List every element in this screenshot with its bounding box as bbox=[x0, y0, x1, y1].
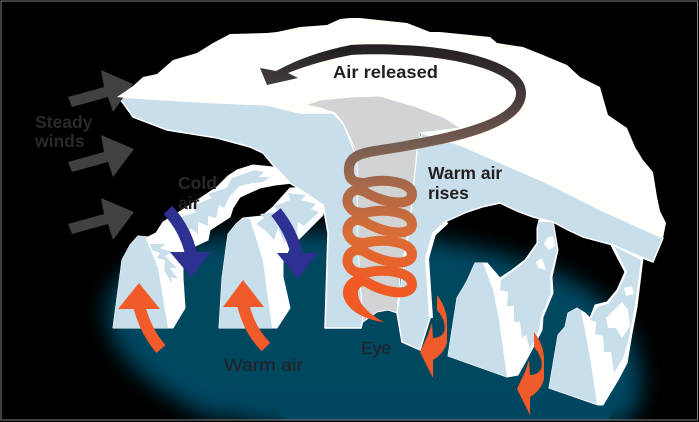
ocean surface glow bbox=[106, 231, 641, 420]
arrow: cold air right bbox=[276, 212, 318, 279]
label: eye: Eye bbox=[361, 338, 391, 358]
eye funnel bbox=[305, 96, 460, 322]
arc ice streaks bbox=[176, 170, 270, 240]
pillar face bbox=[113, 236, 168, 328]
rainband pillar: far left with arc bbox=[113, 165, 293, 328]
spiral tail bbox=[343, 275, 384, 322]
swirl arrow: right bbox=[517, 332, 544, 415]
rainband pillar: second with arc bbox=[219, 188, 323, 328]
pillar face bbox=[448, 263, 507, 377]
cloud top bbox=[117, 18, 666, 238]
cloud underside: left wall bbox=[118, 97, 363, 328]
white ice patches bbox=[544, 236, 555, 250]
spiral arrowhead bbox=[260, 45, 351, 85]
swirl arrow: left bbox=[420, 295, 447, 378]
arrow: steady wind middle bbox=[68, 135, 134, 177]
label: air released: Air released bbox=[333, 62, 438, 82]
spiral stroke bbox=[347, 49, 521, 292]
rainband pillar: far right bbox=[549, 243, 643, 405]
arrow: warm air left bbox=[118, 283, 161, 349]
arrow: warm air right bbox=[223, 280, 266, 347]
label: warm air: Warm air bbox=[224, 355, 303, 375]
pillar streaks bbox=[150, 244, 178, 284]
label: warm air rises: rises bbox=[428, 183, 469, 203]
arc ice streaks bbox=[590, 246, 641, 373]
label: cold air: air bbox=[178, 193, 200, 213]
pillar face bbox=[219, 218, 272, 328]
white ice patches bbox=[624, 286, 634, 296]
arrow: steady wind bottom bbox=[68, 198, 134, 240]
eyewall right inner highlight bbox=[427, 222, 447, 318]
cloud underside: right wall bbox=[397, 133, 663, 350]
rising air spiral bbox=[260, 45, 521, 322]
label: steady winds: winds bbox=[34, 131, 85, 151]
arc ice streaks bbox=[500, 222, 557, 350]
label: steady winds: Steady bbox=[35, 112, 93, 132]
label: cold air: Cold bbox=[178, 173, 217, 193]
arc ice streaks bbox=[256, 193, 319, 244]
pillar face bbox=[549, 308, 597, 404]
label: warm air rises: Warm air bbox=[428, 163, 502, 183]
arrow: cold air left bbox=[168, 210, 211, 277]
arrow: steady wind top bbox=[68, 70, 133, 112]
rainband pillar: front right bbox=[448, 216, 558, 377]
